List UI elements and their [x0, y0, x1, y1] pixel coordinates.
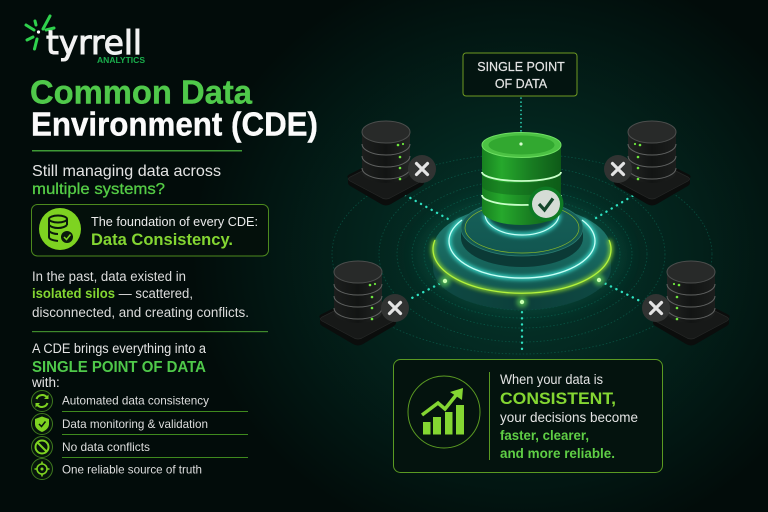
past silos paragraph: In the past, data existed in: [32, 269, 186, 284]
icon: database check: [39, 208, 81, 250]
list item: reliable source: One reliable source of truth: [62, 462, 202, 476]
inner cyan glow: [485, 214, 559, 235]
server: lower left: [319, 261, 409, 346]
outer disk: [433, 249, 611, 310]
list item: no conflicts: [32, 436, 150, 458]
logo subtitle: ANALYTICS: [97, 55, 145, 65]
panel text: [500, 372, 638, 461]
list item: no conflicts: No data conflicts: [62, 440, 150, 454]
panel text: CONSISTENT,: [500, 389, 616, 408]
icon: growth chart: [408, 376, 480, 448]
logo wordmark: tyrrell: [46, 23, 142, 62]
panel text: your decisions become: [500, 410, 638, 425]
logo: [26, 16, 145, 65]
radial orbit rings: [332, 154, 712, 354]
callout: data consistency: Data Consistency.: [91, 231, 233, 249]
central platform: [417, 195, 627, 315]
label: single point of data: OF DATA: [495, 77, 548, 91]
dotted connectors: [405, 98, 642, 352]
central database: [482, 132, 564, 225]
node lights: [440, 274, 604, 308]
intro question: [32, 163, 221, 198]
title: Common Data: [30, 74, 252, 112]
icon: check badge: [528, 186, 564, 222]
past silos paragraph: disconnected, and creating conflicts.: [32, 305, 249, 320]
title: Environment (CDE): [31, 106, 318, 144]
callout text: The foundation of every CDE:: [91, 215, 258, 229]
single point of data intro: A CDE brings everything into a: [32, 341, 206, 356]
intro question: Still managing data across: [32, 163, 221, 180]
past silos paragraph: isolated silos — scattered,: [32, 286, 193, 301]
list item: reliable source: [32, 458, 202, 480]
lime ring: [433, 240, 611, 293]
panel text: When your data is: [500, 372, 603, 387]
feature list: [32, 390, 248, 480]
server: upper left: [347, 121, 436, 206]
panel text: and more reliable.: [500, 446, 615, 461]
inner pedestal: [483, 200, 560, 231]
label: single point of data: SINGLE POINT: [477, 60, 565, 74]
cyan ring: [449, 220, 595, 278]
single point of data intro: [31, 341, 206, 390]
past silos paragraph: [32, 269, 249, 320]
panel: consistent decisions: [394, 360, 662, 472]
panel text: faster, clearer,: [500, 428, 589, 443]
list item: automated consistency: [32, 390, 209, 412]
callout: data consistency: [32, 204, 268, 256]
server: lower right: [642, 261, 730, 346]
title: [30, 74, 318, 144]
list item: monitoring: Data monitoring & validation: [62, 417, 208, 431]
single point of data intro: SINGLE POINT OF DATA: [32, 359, 206, 376]
intro question: multiple systems?: [32, 181, 165, 198]
list item: monitoring: [32, 414, 208, 434]
logo spark icon: [26, 16, 54, 49]
middle tier: [461, 228, 583, 267]
label: single point of data: [463, 53, 577, 96]
single point of data intro: with:: [31, 375, 60, 390]
server: upper right: [604, 121, 691, 206]
list item: automated consistency: Automated data consistency: [62, 394, 209, 408]
